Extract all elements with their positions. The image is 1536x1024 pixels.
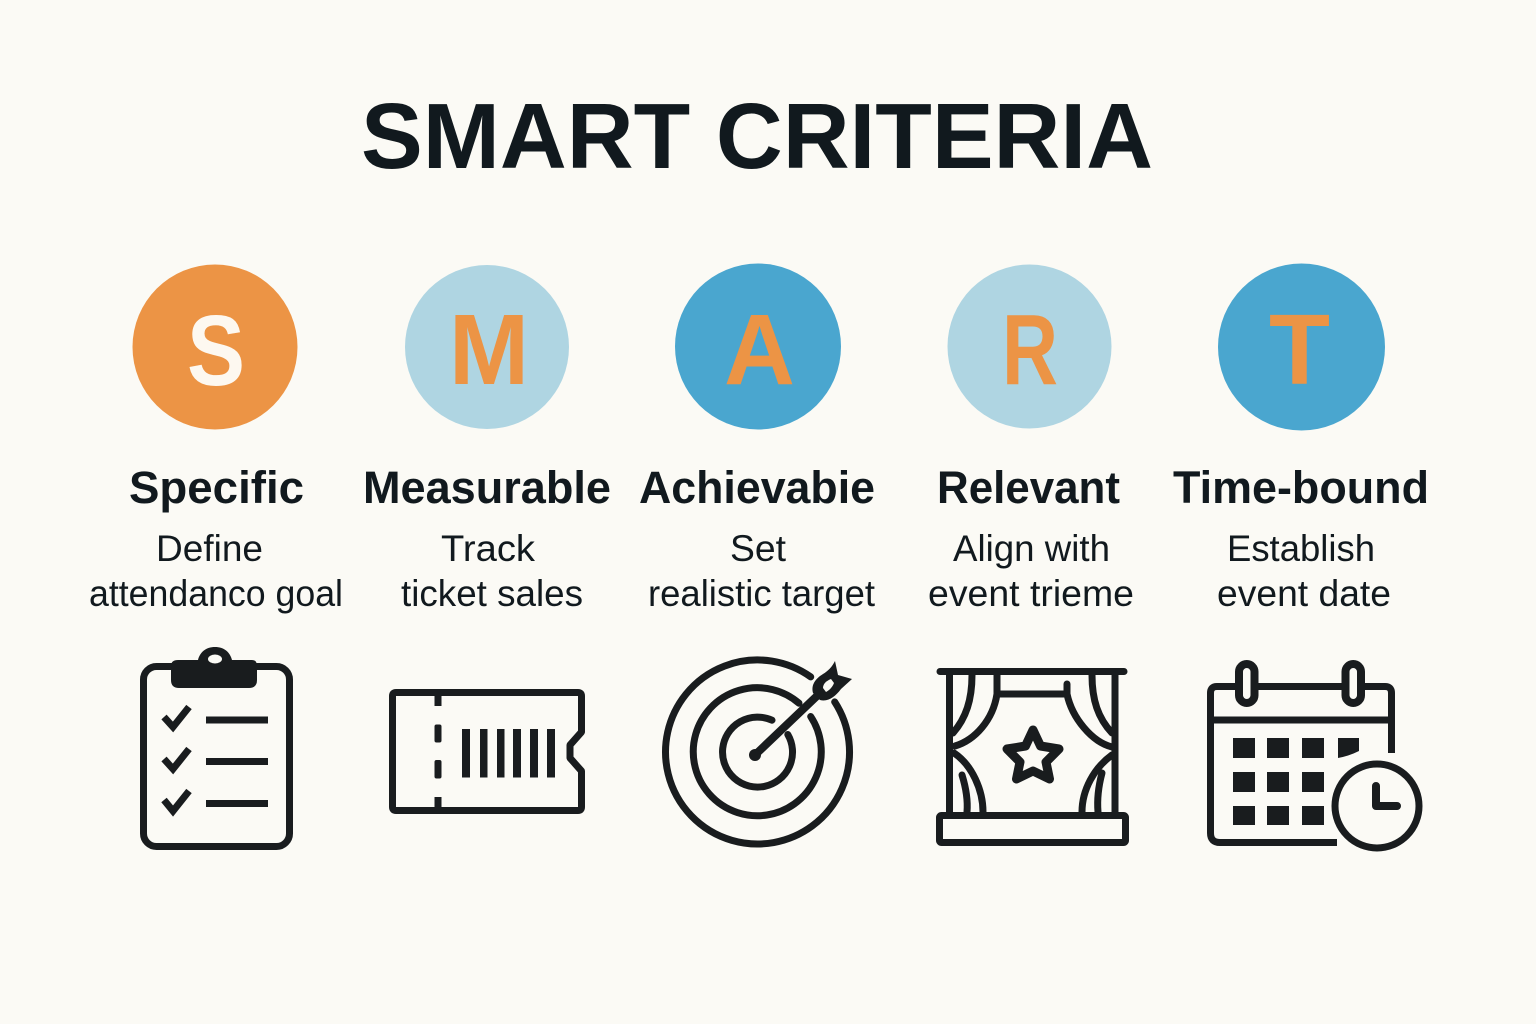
description: Time-bound [1217, 527, 1391, 614]
description: Measurable [401, 527, 583, 614]
badge: M: M [449, 294, 529, 406]
column: Achievable [639, 264, 876, 844]
description: Time-bound: event date [1217, 572, 1391, 614]
description: Measurable: ticket sales [401, 572, 583, 614]
description: Specific [89, 527, 343, 614]
description: Achievable: Set [730, 527, 787, 569]
icon: ticket with barcode [392, 692, 582, 811]
column: Measurable [363, 265, 611, 811]
description: Relevant [928, 527, 1134, 614]
badge: R [948, 264, 1112, 428]
description: Achievable [648, 527, 876, 614]
description: Specific: Define [156, 527, 263, 569]
description: Specific: attendanco goal [89, 572, 343, 614]
heading: Achievabie: Achievabie [639, 462, 875, 513]
icon: calendar with clock [1210, 664, 1419, 848]
title: SMART CRITERIA [361, 84, 1153, 188]
badge: S [132, 264, 298, 430]
icon: theatre stage with curtains and star [940, 672, 1126, 842]
badge: T: T [1269, 294, 1330, 406]
column: Relevant [928, 264, 1134, 842]
icon: clipboard checklist [144, 647, 290, 846]
heading: Time-bound: Time-bound [1173, 462, 1429, 513]
description: Relevant: event trieme [928, 572, 1134, 614]
badge: A [675, 264, 841, 430]
badge: S: S [187, 295, 245, 407]
column: Time-bound [1173, 264, 1429, 848]
badge: R: R [1002, 294, 1058, 406]
heading: Measurable: Measurable [363, 462, 611, 513]
badge: A: A [724, 294, 795, 406]
icon: target with arrow [666, 660, 852, 844]
heading: Specific: Specific [129, 462, 304, 513]
description: Achievable: realistic target [648, 572, 876, 614]
heading: Relevant: Relevant [937, 462, 1120, 513]
badge: T [1218, 264, 1385, 430]
column: Specific [89, 264, 343, 846]
badge: M [405, 265, 569, 429]
description: Measurable: Track [441, 527, 535, 569]
description: Time-bound: Establish [1227, 527, 1375, 569]
description: Relevant: Align with [953, 527, 1110, 569]
